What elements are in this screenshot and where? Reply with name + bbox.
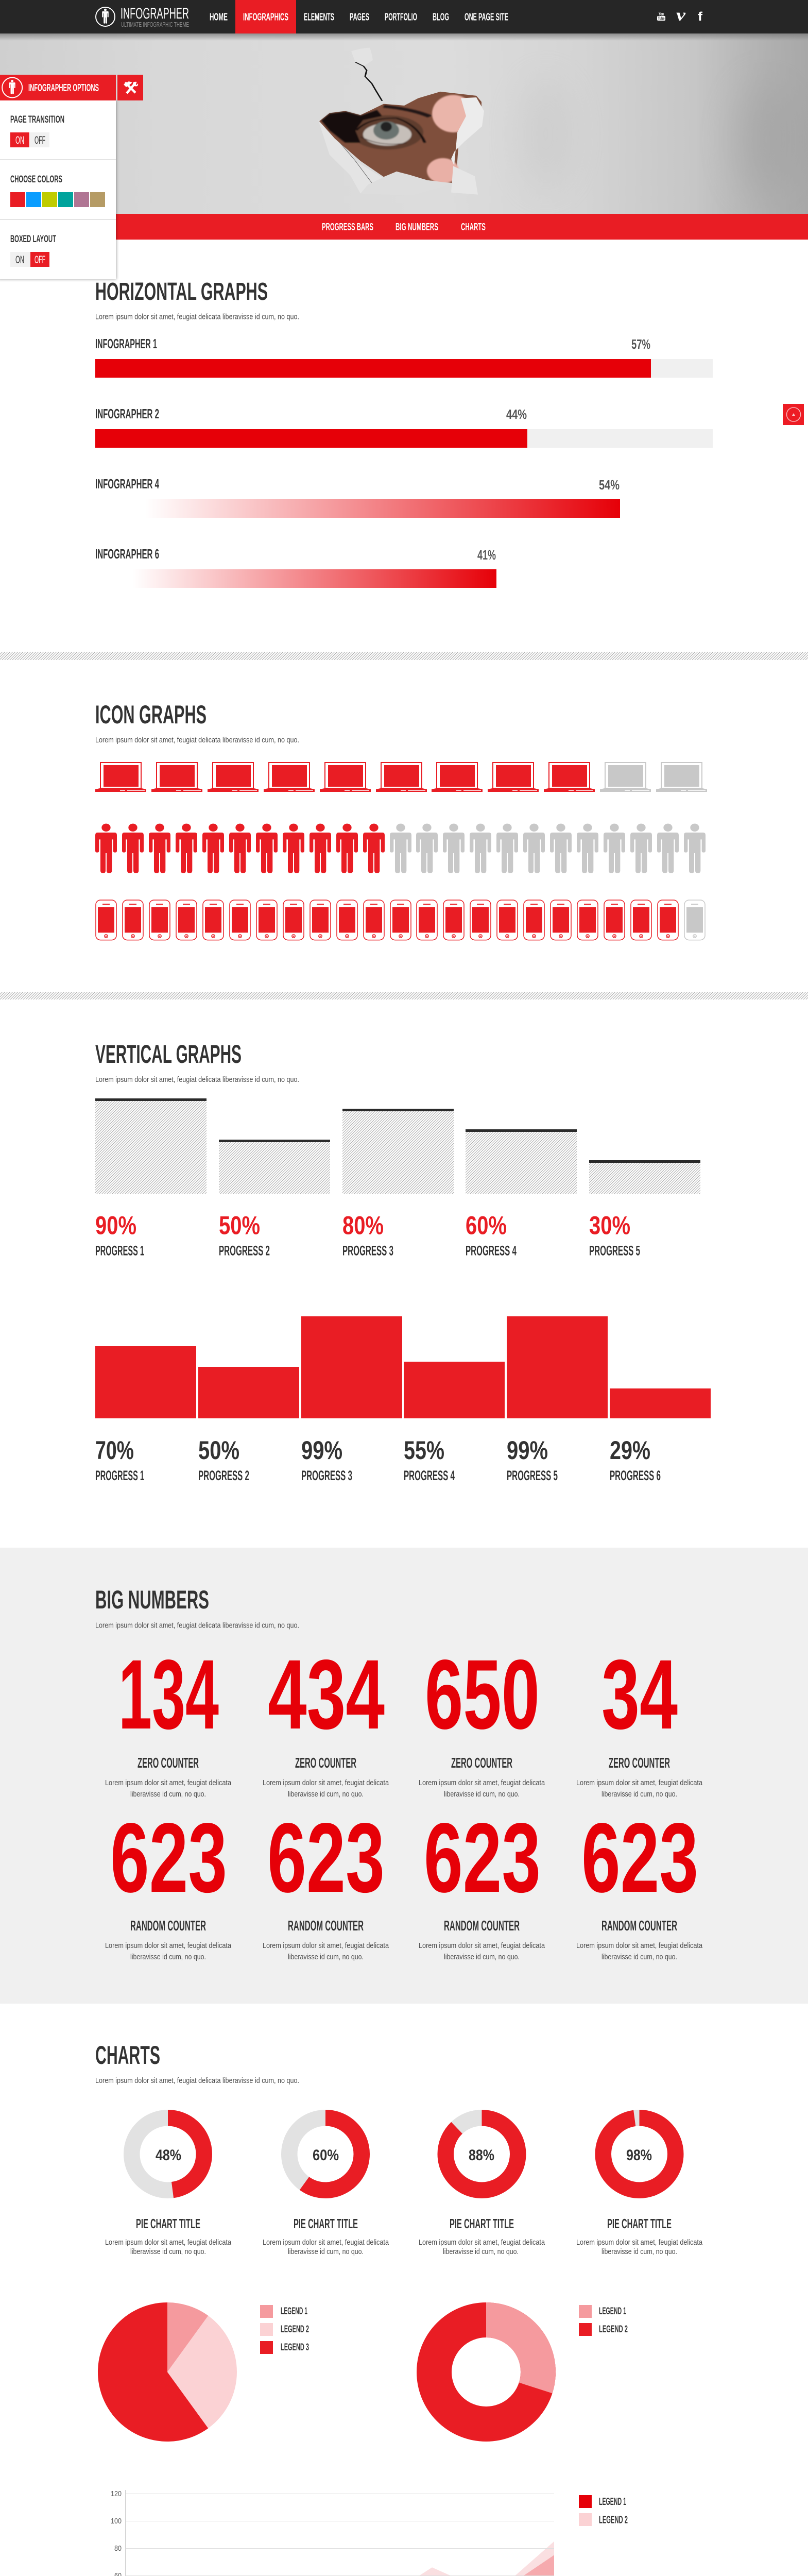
bar labels [95,1211,640,1258]
heading: big numbers: BIG NUMBERS [95,1585,209,1614]
social icons [657,6,703,25]
counter row: random counters: Lorem ipsum dolor sit amet, feugiat delicata [576,1941,703,1950]
boxed layout option [10,234,56,267]
doughnut chart with legend [434,2305,628,2424]
progress bar: infographer 6 [95,546,496,588]
boxed layout option: BOXED LAYOUT [10,234,56,245]
intro text: Lorem ipsum dolor sit amet, feugiat delicata liberavisse id cum, no quo. [95,736,299,744]
intro text: Lorem ipsum dolor sit amet, feugiat delicata liberavisse id cum, no quo. [95,1075,299,1084]
bar labels: 55% [404,1436,444,1465]
counter row: zero counters: ZERO COUNTER [295,1755,356,1771]
panel: big numbers [0,1548,808,2004]
choose colors option [10,174,105,207]
donut chart: 48%: liberavisse id cum, no quo. [130,2247,206,2256]
counter row: random counters: 623 [110,1802,227,1913]
counter row: zero counters: 650 [425,1639,540,1750]
navigation menu: ONE PAGE SITE [465,11,508,23]
counter row: zero counters: 134 [118,1639,219,1750]
red bar chart [95,1316,711,1483]
bar labels: PROGRESS 2 [219,1243,270,1258]
counter row: zero counters: Lorem ipsum dolor sit amet, feugiat delicata [576,1778,703,1787]
axis labels: 100 [111,2517,122,2526]
donut chart: 48%: PIE CHART TITLE [136,2216,200,2231]
navigation menu: PORTFOLIO [385,11,417,23]
bar labels: 29% [610,1436,650,1465]
heading: horizontal graphs: HORIZONTAL GRAPHS [95,278,268,306]
bar labels: 50% [198,1436,239,1465]
progress bar: infographer 6: 41% [477,547,496,563]
donut chart: 88%: Lorem ipsum dolor sit amet, feugiat delicata [419,2238,545,2247]
counter row: random counters: 623 [581,1802,698,1913]
progress bar: infographer 1: 57% [631,336,650,352]
torn wall left flap [318,120,384,194]
progress bar: infographer 6: INFOGRAPHER 6 [95,546,159,562]
navigation menu [210,0,508,33]
bar labels: 70% [95,1436,134,1465]
header bar [0,0,808,33]
hatched bar chart [95,1098,700,1258]
donut chart: 60%: Lorem ipsum dolor sit amet, feugiat delicata [263,2238,389,2247]
navigation menu: INFOGRAPHICS [243,11,288,23]
counter row: zero counters: 434 [268,1639,385,1750]
donut chart: 88% [419,2118,545,2256]
bar labels: 90% [95,1211,136,1240]
bar labels: 99% [507,1436,548,1465]
bar labels: PROGRESS 1 [95,1243,144,1258]
counter row: random counters: Lorem ipsum dolor sit amet, feugiat delicata [263,1941,389,1950]
counter row: zero counters [105,1639,703,1799]
donut chart: 48% [105,2118,232,2256]
bar labels: 99% [301,1436,342,1465]
counter row: random counters: 623 [267,1802,385,1913]
navigation menu: BLOG [433,11,449,23]
boxed layout option: ON [15,254,24,266]
wall crack [351,48,373,66]
legend: LEGEND 2 [281,2324,309,2335]
bar labels: 30% [589,1211,630,1240]
heading: vertical graphs: VERTICAL GRAPHS [95,1040,242,1069]
back to top button [783,404,804,425]
legend [579,2495,628,2526]
section navigation bar: CHARTS [461,222,486,233]
legend: LEGEND 1 [599,2306,626,2317]
bar labels: PROGRESS 5 [507,1468,558,1483]
donut chart: 60%: PIE CHART TITLE [294,2216,358,2231]
bar labels: 50% [219,1211,260,1240]
logo [96,5,189,28]
bar labels: PROGRESS 4 [404,1468,455,1483]
pie chart with legend [98,2302,309,2442]
counter row: random counters: liberavisse id cum, no quo. [130,1953,206,1961]
page transition option: PAGE TRANSITION [10,114,64,125]
progress bar: infographer 1 [95,336,713,378]
legend: LEGEND 3 [281,2342,309,2353]
icon graph: phones [96,900,705,940]
page transition option [10,114,64,147]
legend: LEGEND 1 [281,2306,307,2317]
legend: LEGEND 2 [599,2514,628,2526]
counter row: zero counters: liberavisse id cum, no quo. [288,1790,364,1799]
donut chart: 88%: PIE CHART TITLE [450,2216,514,2231]
social icons: v [676,6,685,25]
legend [260,2305,309,2354]
bar labels: PROGRESS 3 [342,1243,393,1258]
counter row: zero counters: ZERO COUNTER [137,1755,199,1771]
progress bar: infographer 2: 44% [506,406,527,422]
donut chart: 60%: 60% [313,2147,339,2164]
counter row: zero counters: Lorem ipsum dolor sit amet, feugiat delicata [419,1778,545,1787]
hero image: eye peeking through torn wall [0,33,808,214]
heading: icon graphs: ICON GRAPHS [95,700,207,729]
donut chart: 98%: liberavisse id cum, no quo. [601,2247,677,2256]
axis labels: 80 [114,2544,122,2553]
counter row: zero counters: liberavisse id cum, no quo. [130,1790,206,1799]
section navigation bar: BIG NUMBERS [396,222,438,233]
donut chart: 88%: 88% [469,2147,494,2164]
panel header: INFOGRAPHER OPTIONS [28,82,99,94]
progress bar: infographer 1: INFOGRAPHER 1 [95,336,157,351]
bar labels: PROGRESS 5 [589,1243,640,1258]
bar labels: PROGRESS 4 [466,1243,517,1258]
progress bar: infographer 2 [95,406,713,448]
counter row: random counters: liberavisse id cum, no quo. [444,1953,520,1961]
area chart: straight lines [95,2489,628,2576]
bar labels [95,1436,661,1483]
page transition option: OFF [35,134,45,146]
social icons: You [659,11,664,16]
options panel [0,75,143,279]
social icons: Tube [658,16,665,21]
progress bar: infographer 2: INFOGRAPHER 2 [95,406,159,421]
bar labels: PROGRESS 6 [610,1468,661,1483]
intro text: Lorem ipsum dolor sit amet, feugiat delicata liberavisse id cum, no quo. [95,312,299,321]
counter row: random counters [105,1802,703,1961]
fingers [432,95,474,132]
page transition option: ON [15,134,24,146]
counter row: random counters: 623 [424,1802,541,1913]
legend [579,2305,628,2336]
navigation menu: HOME [210,11,228,23]
bar labels: 80% [342,1211,384,1240]
counter row: random counters: RANDOM COUNTER [130,1918,206,1934]
counter row: random counters: Lorem ipsum dolor sit amet, feugiat delicata [105,1941,232,1950]
donut chart: 60% [263,2118,389,2256]
intro text: Lorem ipsum dolor sit amet, feugiat delicata liberavisse id cum, no quo. [95,1621,299,1630]
heading: charts: CHARTS [95,2041,160,2070]
donut chart: 48%: Lorem ipsum dolor sit amet, feugiat delicata [105,2238,232,2247]
legend: LEGEND 2 [599,2324,628,2335]
counter row: zero counters: liberavisse id cum, no quo. [601,1790,677,1799]
eye and surrounding shading [321,95,474,183]
donut chart: 98%: 98% [626,2147,652,2164]
progress bar: infographer 4: INFOGRAPHER 4 [95,476,159,492]
navigation menu: ELEMENTS [304,11,334,23]
logo: ULTIMATE INFOGRAPHIC THEME [121,21,189,28]
hole with skin [319,92,482,183]
donut chart: 48%: 48% [156,2147,181,2164]
counter row: random counters: Lorem ipsum dolor sit amet, feugiat delicata [419,1941,545,1950]
icon graph: people [95,824,706,873]
donut chart: 88%: liberavisse id cum, no quo. [443,2247,519,2256]
torn paper edge [451,97,484,165]
navigation menu: PAGES [350,11,369,23]
panel header [0,75,116,100]
logo: INFOGRAPHER [121,5,189,22]
counter row: random counters: RANDOM COUNTER [601,1918,677,1934]
donut chart: 98% [576,2118,703,2256]
donut chart: 98%: PIE CHART TITLE [607,2216,672,2231]
social icons: f [698,10,703,24]
counter row: zero counters: 34 [601,1639,678,1750]
bar labels: PROGRESS 2 [198,1468,249,1483]
intro text: Lorem ipsum dolor sit amet, feugiat delicata liberavisse id cum, no quo. [95,2076,299,2085]
axis labels [111,2489,569,2576]
counter row: zero counters: ZERO COUNTER [609,1755,670,1771]
legend: LEGEND 1 [599,2496,626,2507]
counter row: zero counters: ZERO COUNTER [451,1755,512,1771]
bar labels: 60% [466,1211,507,1240]
section navigation bar [0,214,808,240]
counter row: random counters: RANDOM COUNTER [288,1918,364,1934]
icon graph: laptops [95,762,707,792]
choose colors option: CHOOSE COLORS [10,174,62,185]
counter row: random counters: liberavisse id cum, no quo. [288,1953,364,1961]
counter row: random counters: liberavisse id cum, no quo. [601,1953,677,1961]
progress bar: infographer 4: 54% [599,477,620,493]
icon: tools button [117,75,143,100]
bar labels: PROGRESS 1 [95,1468,144,1483]
counter row: zero counters: Lorem ipsum dolor sit amet, feugiat delicata [105,1778,232,1787]
donut chart: 98%: Lorem ipsum dolor sit amet, feugiat delicata [576,2238,703,2247]
boxed layout option: OFF [35,254,45,266]
donut chart: 60%: liberavisse id cum, no quo. [288,2247,364,2256]
counter row: zero counters: Lorem ipsum dolor sit amet, feugiat delicata [263,1778,389,1787]
bar labels: PROGRESS 3 [301,1468,352,1483]
counter row: zero counters: liberavisse id cum, no quo. [444,1790,520,1799]
axis labels: 120 [111,2489,122,2498]
counter row: random counters: RANDOM COUNTER [444,1918,520,1934]
section navigation bar: PROGRESS BARS [322,222,373,233]
progress bar: infographer 4 [95,476,620,518]
